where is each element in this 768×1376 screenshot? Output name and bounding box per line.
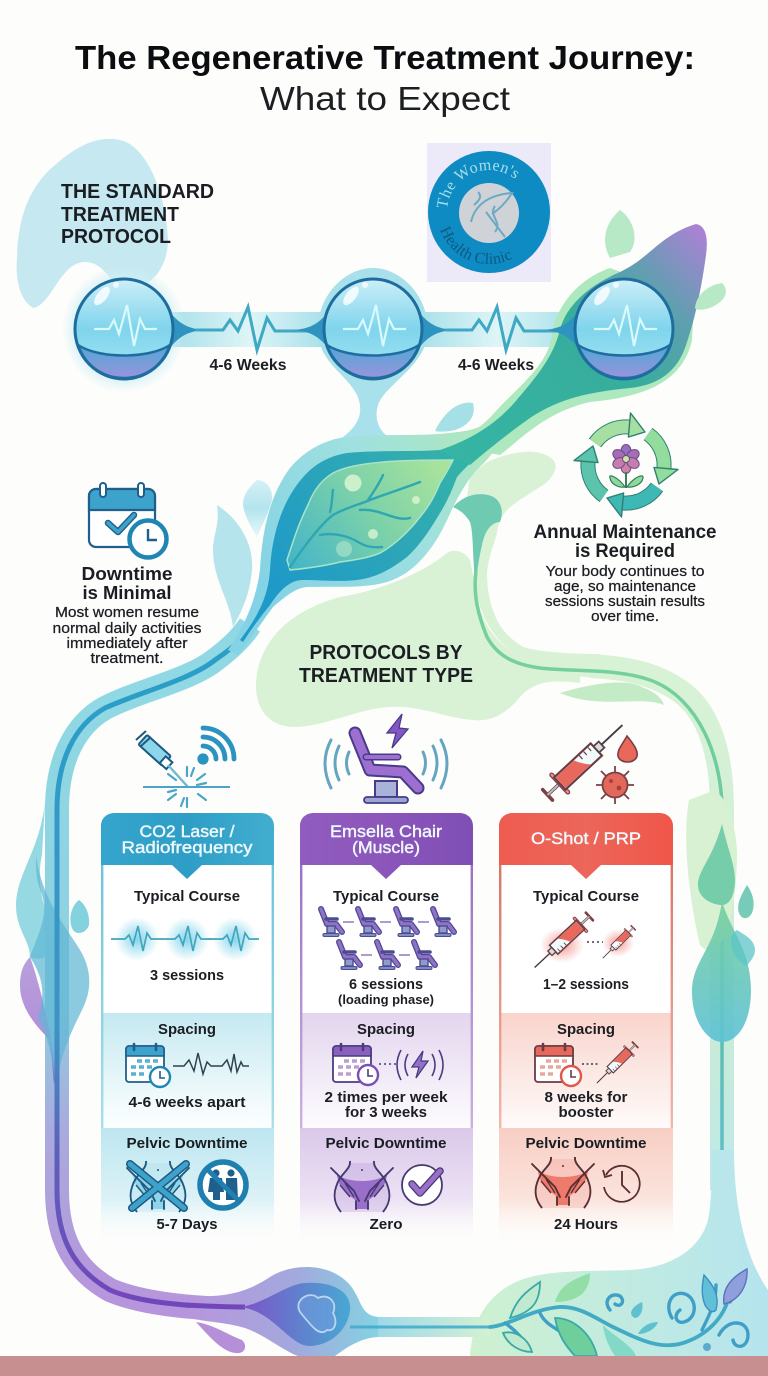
header title: Radiofrequency [122,838,253,857]
label: typical course: Typical Course [333,888,439,905]
value: spacing [324,1089,448,1121]
section: spacing [300,1013,473,1128]
text: annual maintenance: Your body continues to [546,563,704,580]
icon: calendar and pulse [126,1044,249,1087]
panel: standard treatment protocol heading: PROTOCOL [61,226,171,248]
value: downtime: Zero [370,1216,402,1233]
panel: O-Shot / PRP [499,813,673,1248]
text: downtime is minimal: Downtime [82,564,172,584]
label: typical course: Typical Course [134,888,240,905]
session capsule 3 [575,279,673,379]
section: pelvic downtime [499,1128,673,1248]
label: spacing: Spacing [557,1021,615,1038]
header title: (Muscle) [352,838,420,857]
panel: standard treatment protocol heading [17,139,214,308]
value: spacing: 4-6 weeks apart [128,1094,246,1111]
logo: The Women's Health Clinic: Health Clinic [440,226,512,264]
icon: three pulses [111,917,259,961]
header: CO2 [101,813,274,879]
value: sessions: 3 sessions [150,967,224,984]
text: downtime is minimal: normal daily activities [52,620,202,637]
title: The Regenerative Treatment Journey: [75,39,695,76]
value: sessions: (loading phase) [338,992,434,1007]
section: pelvic downtime [101,1128,274,1248]
value: spacing: booster [558,1104,614,1121]
session capsule 2 [324,279,422,379]
leaf [287,460,453,570]
left drops cluster [16,802,89,1088]
teal flow from session 3 to leaf [440,224,707,465]
value: sessions [338,976,434,1007]
bottom bulb with cell [185,1267,490,1356]
right green curl [453,494,502,585]
panel: standard treatment protocol heading: THE STANDARD [61,181,214,203]
left petal wisps [213,480,272,627]
value: sessions: 1–2 sessions [543,976,629,993]
interval label 2: 4-6 Weeks [458,357,534,374]
title [75,39,695,117]
logo: The Women's Health Clinic [427,143,551,282]
value: sessions: 6 sessions [349,976,423,993]
panel: Emsella chair [300,813,473,1248]
text: downtime is minimal: treatment. [90,650,164,667]
icon: calendar and booster syringe [535,1040,640,1088]
leaf bands [228,410,520,655]
panel: standard treatment protocol heading: TREATMENT [61,204,179,226]
value: spacing [544,1089,628,1121]
icon: two syringes [529,910,637,974]
header title [330,822,442,857]
text: downtime is minimal [52,564,202,667]
panel: CO2 laser / radiofrequency [101,813,274,1248]
vine with leaves and curls [490,1269,748,1356]
text: annual maintenance: sessions sustain results [545,593,705,610]
label: pelvic downtime: Pelvic Downtime [326,1135,446,1152]
value: downtime: 5-7 Days [156,1216,218,1233]
card side borders [101,865,274,1128]
label: pelvic downtime: Pelvic Downtime [126,1135,248,1152]
footer bar [0,1356,768,1376]
label: typical course: Typical Course [533,888,639,905]
protocols background blob [256,551,580,727]
halo around session 1 [62,265,186,393]
header: O-Shot [499,813,673,879]
section: spacing [499,1013,673,1128]
connector bands between sessions [172,312,575,347]
logo: The Women's Health Clinic: The Women's [436,162,518,208]
icon: syringe, blood drop and platelet [539,716,637,804]
card side borders [300,865,473,1128]
main left stream: dark line [57,620,258,1307]
session capsule 1 [75,279,173,379]
label: spacing: Spacing [357,1021,415,1038]
text: annual maintenance: is Required [575,541,675,562]
icon: calendar with clock [89,483,166,558]
heading: protocols by treatment type: PROTOCOLS BY [310,642,463,664]
header title: Emsella Chair [330,822,442,841]
main left stream: light band [57,625,250,1309]
timeline pulse 1 [170,307,328,350]
timeline pulse 2 [419,307,578,350]
heading: protocols by treatment type: TREATMENT TYPE [299,665,473,687]
text: downtime is minimal: Most women resume [55,604,199,621]
section: typical course body [499,860,673,1014]
card side borders [499,865,673,1128]
header title: O-Shot / PRP [531,829,641,848]
right stream: light band [590,666,722,1190]
section: typical course body [101,860,274,1014]
value: spacing: for 3 weeks [345,1104,427,1121]
text: annual maintenance: age, so maintenance [554,578,696,595]
section: typical course body [300,860,473,1014]
value: downtime: 24 Hours [554,1216,618,1233]
value: spacing: 8 weeks for [544,1089,628,1106]
upper right green band [465,452,600,678]
light green body behind session 3 [440,268,694,455]
right drops cluster [686,790,755,1042]
small wing leaf [560,683,664,705]
section: spacing [101,1013,274,1128]
heading: protocols by treatment type [299,642,473,687]
header title [122,822,253,857]
title: What to Expect [260,80,510,117]
text: annual maintenance: over time. [591,608,659,625]
icon: recycling arrows with flower [574,413,678,517]
right stream: dark line [475,570,722,1303]
header title: CO2 Laser / [140,822,235,841]
icon: crossed pelvis and no intimacy [127,1161,246,1212]
icon: laser and radiofrequency [136,728,234,807]
text: annual maintenance: Annual Maintenance [534,522,716,543]
icon: Emsella chair [325,714,447,803]
icon: pelvis and clock [532,1157,640,1208]
value: spacing: 2 times per week [324,1089,448,1106]
text: annual maintenance [534,522,716,625]
label: pelvic downtime: Pelvic Downtime [526,1135,646,1152]
icon: calendar and electromagnetic pulse [333,1044,443,1085]
icon: pelvis and check [331,1161,442,1212]
decorative leaves near session 3 [435,210,726,432]
halo and stem from session 2 [318,268,428,452]
section: pelvic downtime [300,1128,473,1248]
header: Emsella [300,813,473,879]
bottom right blob [470,1150,768,1356]
icon: six chairs [321,909,454,970]
text: downtime is minimal: immediately after [66,635,188,652]
label: spacing: Spacing [158,1021,216,1038]
interval label 1: 4-6 Weeks [210,357,287,374]
text: downtime is minimal: is Minimal [82,583,172,603]
